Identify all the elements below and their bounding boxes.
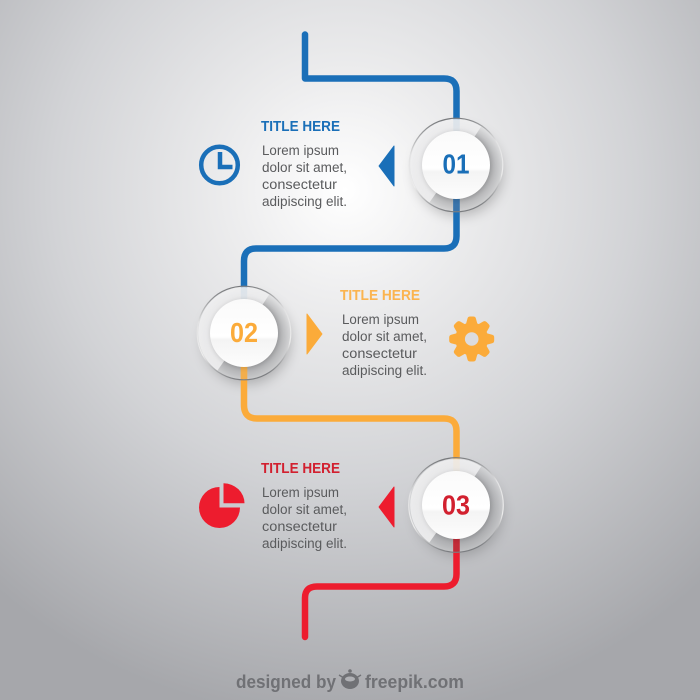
text block: step 03: consectetur <box>262 519 338 534</box>
timeline path: blue <box>244 34 456 333</box>
text block: step 02: adipiscing elit. <box>342 363 427 378</box>
number 02: 02 <box>230 317 258 348</box>
footer: freepik credit: freepik.com <box>365 672 464 692</box>
text block: step 02: consectetur <box>342 346 418 361</box>
text block: step 03: TITLE HERE <box>261 461 340 477</box>
text block: step 02: dolor sit amet, <box>342 329 427 344</box>
step 01 node <box>409 118 503 212</box>
text block: step 01: consectetur <box>262 177 338 192</box>
text block: step 03: Lorem ipsum <box>262 485 339 500</box>
arrow: step 01 <box>379 146 394 186</box>
footer: freepik credit: designed by <box>236 672 336 692</box>
timeline path: red <box>305 505 456 637</box>
icon: clock <box>201 147 238 183</box>
text block: step 01: dolor sit amet, <box>262 160 347 175</box>
arrow: step 03 <box>379 487 394 527</box>
footer: freepik credit <box>236 669 464 692</box>
text block: step 02 <box>340 288 427 378</box>
icon: gear <box>449 316 494 362</box>
text block: step 01: adipiscing elit. <box>262 194 347 209</box>
text block: step 03: adipiscing elit. <box>262 536 347 551</box>
text block: step 02: Lorem ipsum <box>342 312 419 327</box>
step 03 node <box>408 458 504 552</box>
text block: step 02: TITLE HERE <box>340 288 420 304</box>
text block: step 03: dolor sit amet, <box>262 502 347 517</box>
step 02 node <box>197 286 291 380</box>
text block: step 01: TITLE HERE <box>261 119 340 135</box>
text block: step 03 <box>261 461 347 551</box>
node drop shadows <box>203 128 503 556</box>
text block: step 01 <box>261 119 347 209</box>
number 01: 01 <box>442 148 470 180</box>
icon: pie chart <box>199 483 244 528</box>
timeline path: orange <box>244 333 456 505</box>
text block: step 01: Lorem ipsum <box>262 143 339 158</box>
number 03: 03 <box>442 490 470 520</box>
icon: freepik mascot <box>339 669 361 689</box>
arrow: step 02 <box>307 314 322 354</box>
